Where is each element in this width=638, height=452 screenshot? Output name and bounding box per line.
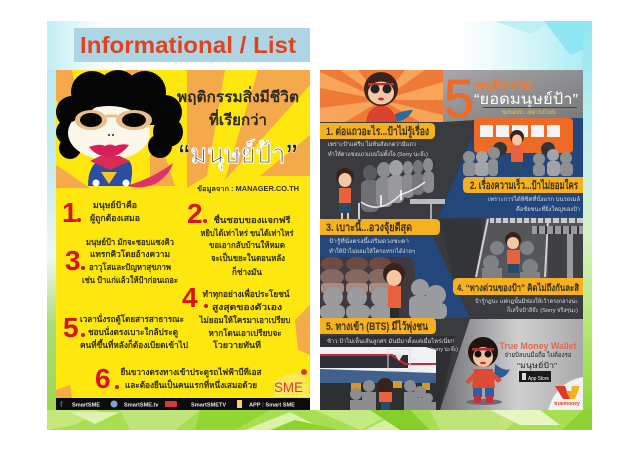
banner 4 [453,278,583,295]
bottom grey zone [440,319,583,410]
header title [444,69,578,129]
sunburst rays [56,70,310,398]
list text [80,200,294,390]
title banner: Informational / List [80,32,296,58]
list text: และต้องยืนเป็นคนแรกที่หนึ่งเสมอด้วย [125,378,257,390]
list numbers: 2 [187,198,203,229]
logo: SME [274,369,308,397]
logo: truemoney [548,377,583,410]
social media footer: SmartSME.tv [124,402,159,408]
list text: ก็ช่างมัน [232,265,262,277]
text: True Money Wallet ad: True Money Wallet [500,341,577,352]
text: item 3: ทำให้ป้าไม่ยอมให้ใครแทรกได้ง่ายๆ [329,247,415,255]
social media footer: APP : Smart SME [249,402,295,408]
list text: เวลานั่งรถตู้โดยสารสาธารณะ [80,312,184,325]
logo: truemoney: truemoney [554,401,580,407]
text: True Money Wallet ad: “มนุษย์ป้า” [517,361,558,370]
text: item 4: ป้ารู้กฎนะ แต่กฎนั้นมีช่องให้เว้าตรงกลางน่ะ [475,296,578,305]
list text: คนที่ขึ้นที่หลังก็ต้องเบียดเข้าไป [80,338,189,350]
banner 5: 5. ทางเข้า (BTS) มีไว้พุ่งชน [326,319,428,334]
heading [177,86,299,171]
text: item 2 [488,195,580,213]
text: item 3 [329,236,415,255]
list text: ทำทุกอย่างเพื่อประโยชน์ [202,287,290,300]
banner 3: 3. เบาะนี้...อวงจุ้ยดีสุด [326,219,412,235]
banner 1: 1. ต่อแถวอะไร...ป้าไม่รู้เรื่อง [326,123,429,139]
badge: App Store [519,371,551,382]
list text: หยิบได้เท่าไหร่ ขนได้เท่าไหร่ [200,228,294,238]
text: True Money Wallet ad [500,341,577,370]
list text: ไม่ยอมให้ใครมาเอาเปรียบ [199,315,290,325]
panel: right poster [320,69,583,410]
text: item 4 [475,296,578,314]
text: True Money Wallet ad: จ่ายบิลบนมือถือ ไม่ต้องรอ [504,351,572,359]
list text: อาวุโสและปัญหาสุขภาพ [89,262,171,273]
logo: SME: SME [274,379,303,395]
illustration: orange bus [463,118,573,176]
icon: hero mascot [465,337,510,405]
list text: ผู้ถูกต้องเสมอ [90,213,140,224]
text: item 1: เพราะป้าแค่รีบ ไม่ทันสังเกตว่ามีแถว [328,140,416,148]
social media footer: SmartSME [72,402,100,408]
panel: left poster [56,70,310,410]
banner 1 [320,123,435,139]
header sunburst [320,70,443,122]
heading: พฤติกรรมสิ่งมีชีวิต [177,86,299,106]
banner 5 [320,318,436,334]
text: item 1: ทำให้ตาแซงแถวแบบไม่ตั้งใจ (Sorry นะจ๊ะ) [328,149,428,158]
glasses [75,110,107,130]
header title: พฤติกรรม [475,77,532,93]
illustration: queue [336,158,445,219]
list text: มนุษย์ป้าคือ [93,200,137,211]
lips [89,144,129,157]
banner 2: 2. เรื่องความเร็ว...ป้าไม่ยอมใคร [470,177,578,192]
body [88,160,132,186]
blue zones [438,118,583,218]
list text: จะเป็นขยะในตอนหลัง [211,251,285,263]
list text: ชอบนั่งตรงเบาะใกล้ประตู [88,325,178,338]
list numbers: 6 [95,363,111,394]
list text: ขอเอากลับบ้านให้หมด [209,240,285,250]
list numbers: 1 [62,197,78,228]
banner 3 [320,219,440,235]
icon: header mascot [364,72,413,122]
list text: สูงสุดของตัวเอง [212,302,282,313]
list text: ยืนขวางตรงทางเข้าประตูรถไฟฟ้าบีทีเอส [120,367,262,378]
text: item 5: ช้าว ป้าไม่เห็นเส้นลูกศร มันมีมาตั้งแต่เมื่อไหร่เนี่ย!! [327,336,454,345]
list text: แทรกคิวโดยอ้างความ [90,249,170,259]
text: item 5: (sorry นะจ๊ะ) [430,346,458,353]
list text: เช่น ป้าแก่แล้วให้ป้าก่อนเถอะ [82,275,178,285]
social media footer [56,398,310,410]
list text: ชื่นชอบของแจกฟรี [214,213,291,225]
list numbers: 5 [63,312,79,343]
illustration: bus seats [320,257,447,319]
list text: มนุษย์ป้า มักจะชอบแซงคิว [86,237,174,248]
heading: ที่เรียกว่า [209,109,267,129]
social media footer: SmartSMETV [191,402,226,408]
illustration: escalator [475,218,583,278]
list numbers [62,197,208,394]
social media footer: f [60,400,63,409]
text: item 2: เพราะการได้พิชิตที่นั่งแรก บนรถเมล์ [488,195,580,203]
badge: App Store: App Store [528,376,549,382]
banner 4: 4. “ทางด่วนของป้า” คิดไม่ถึงกันละสิ [457,282,579,294]
list numbers: 3 [65,245,81,276]
icon: auntie mascot [56,70,183,188]
list numbers: 4 [182,282,198,313]
illustration: BTS train [320,347,436,410]
text: item 3: ป้ารู้ที่นั่งตรงนี้เสริมดวงชะตา [329,236,409,245]
text: item 2: คือชัยชนะที่ยิ่งใหญ่ของป้า [516,205,580,213]
header title: “ยอดมนุษย์ป้า” [474,91,578,109]
text: item 1 [328,140,428,158]
title banner [74,28,310,62]
header grey area [443,70,583,122]
text: item 5 [327,336,458,353]
list text: โวยวายทันที [212,340,261,350]
source note: ข้อมูลจาก : MANAGER.CO.TH [197,184,299,194]
text: item 4: ก็เสร็จป้าสิจ๊ะ (Sorry จริงๆนะ) [507,305,578,314]
heading: “มนุษย์ป้า” [178,138,298,171]
cape [125,163,173,188]
list text: หากโดนเอาเปรียบจะ [208,328,282,338]
banner 2 [463,177,583,193]
header title: ชุมชนคนรัก...ลดความป้าฉบับ [502,109,556,116]
header title: 5 [444,69,474,129]
slide background [47,21,592,430]
